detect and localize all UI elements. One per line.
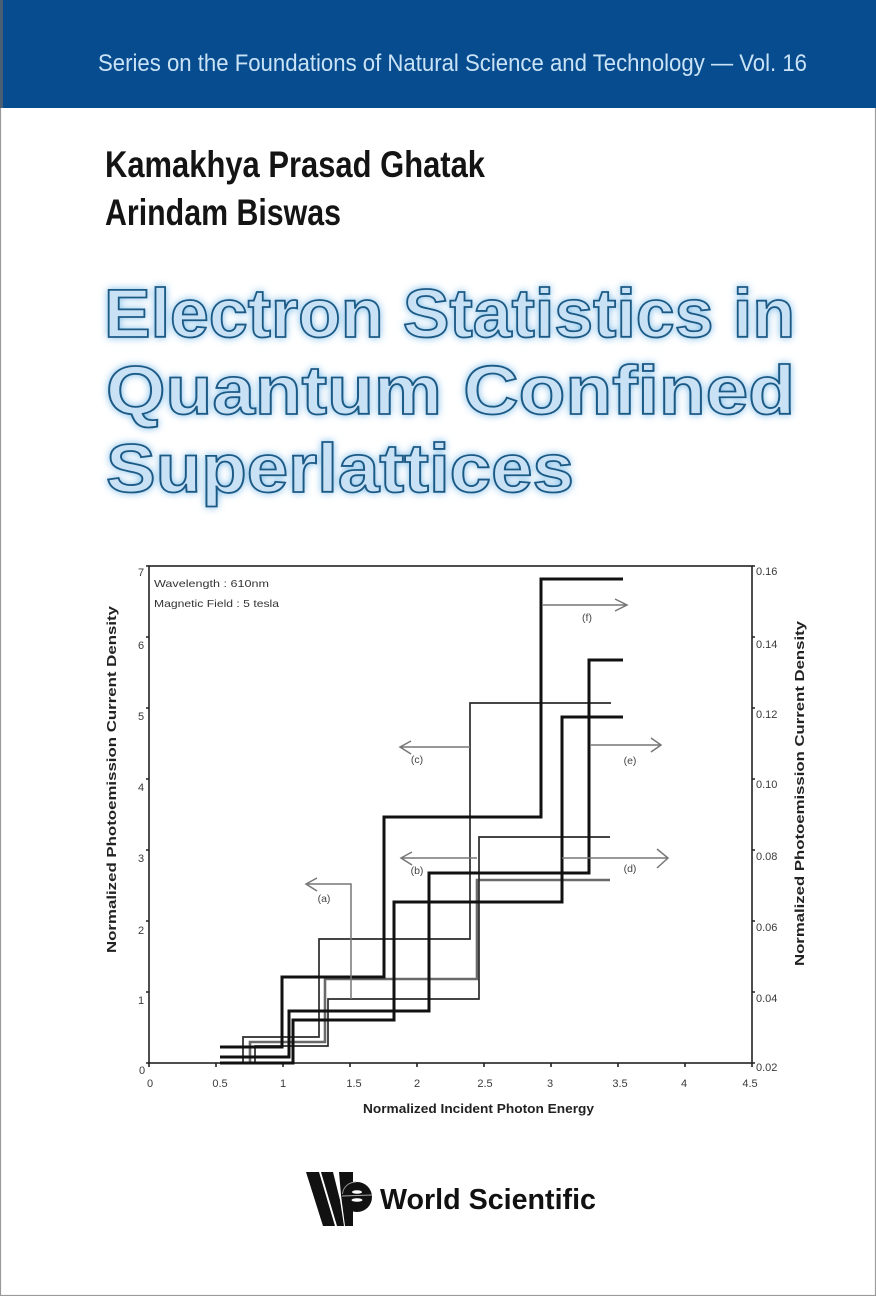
arrow (a): (a) bbox=[318, 893, 330, 905]
x axis numbers: 2.5 bbox=[477, 1078, 493, 1090]
arrow (d): (d) bbox=[624, 863, 636, 875]
arrow (e) bbox=[590, 738, 661, 767]
chart bbox=[104, 566, 807, 1116]
thin curve (c) bbox=[255, 837, 610, 1063]
left axis numbers bbox=[138, 567, 145, 1077]
x axis numbers: 2 bbox=[414, 1078, 420, 1090]
x axis numbers: 0.5 bbox=[212, 1078, 228, 1090]
right axis numbers: 0.04 bbox=[756, 993, 777, 1005]
arrow (b) bbox=[401, 852, 477, 877]
publisher name: World Scientific bbox=[380, 1184, 596, 1216]
arrow (b): (b) bbox=[411, 865, 423, 877]
plot frame and ticks bbox=[146, 566, 755, 1067]
right axis numbers bbox=[756, 566, 777, 1074]
arrow (f): (f) bbox=[582, 612, 592, 624]
icon: WS mark bbox=[306, 1172, 372, 1226]
gray curve (b) bbox=[250, 880, 610, 1063]
arrow (d) bbox=[562, 849, 668, 875]
title: Quantum Confined bbox=[106, 352, 795, 429]
x axis numbers: 1.5 bbox=[346, 1078, 362, 1090]
right axis numbers: 0.06 bbox=[756, 922, 777, 934]
thin curve (a) bbox=[243, 703, 611, 1063]
title: Superlattices bbox=[106, 430, 574, 507]
authors bbox=[105, 144, 485, 233]
x axis title: Normalized Incident Photon Energy bbox=[363, 1101, 595, 1116]
right axis numbers: 0.02 bbox=[756, 1062, 777, 1074]
left axis numbers: 7 bbox=[138, 567, 144, 579]
authors: Kamakhya Prasad Ghatak bbox=[105, 144, 485, 185]
x axis numbers: 3.5 bbox=[612, 1078, 628, 1090]
annotation: wavelength and field bbox=[154, 578, 279, 610]
left axis numbers: 4 bbox=[138, 782, 144, 794]
publisher logo bbox=[306, 1172, 596, 1226]
arrow (c) bbox=[400, 741, 470, 766]
left axis title: Normalized Photoemission Current Density bbox=[104, 605, 119, 953]
step curves bbox=[220, 579, 623, 1063]
x axis numbers: 1 bbox=[280, 1078, 286, 1090]
annotation: wavelength and field: Wavelength : 610nm bbox=[154, 578, 269, 590]
arrow (e): (e) bbox=[624, 755, 636, 767]
series line: Series on the Foundations of Natural Science and Technology — Vol. 16 bbox=[98, 50, 807, 77]
title bbox=[104, 275, 795, 507]
left axis numbers: 6 bbox=[138, 640, 144, 652]
right axis numbers: 0.14 bbox=[756, 639, 777, 651]
authors: Arindam Biswas bbox=[105, 192, 341, 233]
thick curve (e) bbox=[220, 660, 623, 1057]
annotation: wavelength and field: Magnetic Field : 5 tesla bbox=[154, 598, 279, 610]
right axis numbers: 0.08 bbox=[756, 851, 777, 863]
right axis numbers: 0.16 bbox=[756, 566, 777, 578]
title: Electron Statistics in bbox=[104, 275, 795, 352]
arrow (c): (c) bbox=[411, 754, 423, 766]
arrow (f) bbox=[542, 599, 627, 624]
right axis numbers: 0.12 bbox=[756, 709, 777, 721]
x axis numbers: 0 bbox=[147, 1078, 153, 1090]
left axis numbers: 1 bbox=[138, 995, 144, 1007]
left axis numbers: 5 bbox=[138, 711, 144, 723]
left axis numbers: 3 bbox=[138, 853, 144, 865]
x axis numbers: 4 bbox=[681, 1078, 687, 1090]
thick curve (f) bbox=[220, 579, 623, 1047]
x axis numbers: 3 bbox=[547, 1078, 553, 1090]
right axis title: Normalized Photoemission Current Density bbox=[792, 620, 807, 966]
thick curve (d) bbox=[220, 717, 623, 1063]
left axis numbers: 0 bbox=[139, 1065, 145, 1077]
x axis numbers: 4.5 bbox=[742, 1078, 758, 1090]
header band bbox=[0, 0, 876, 108]
left axis numbers: 2 bbox=[138, 925, 144, 937]
x axis numbers bbox=[147, 1078, 758, 1090]
arrow (a) bbox=[306, 878, 351, 999]
right axis numbers: 0.10 bbox=[756, 779, 777, 791]
